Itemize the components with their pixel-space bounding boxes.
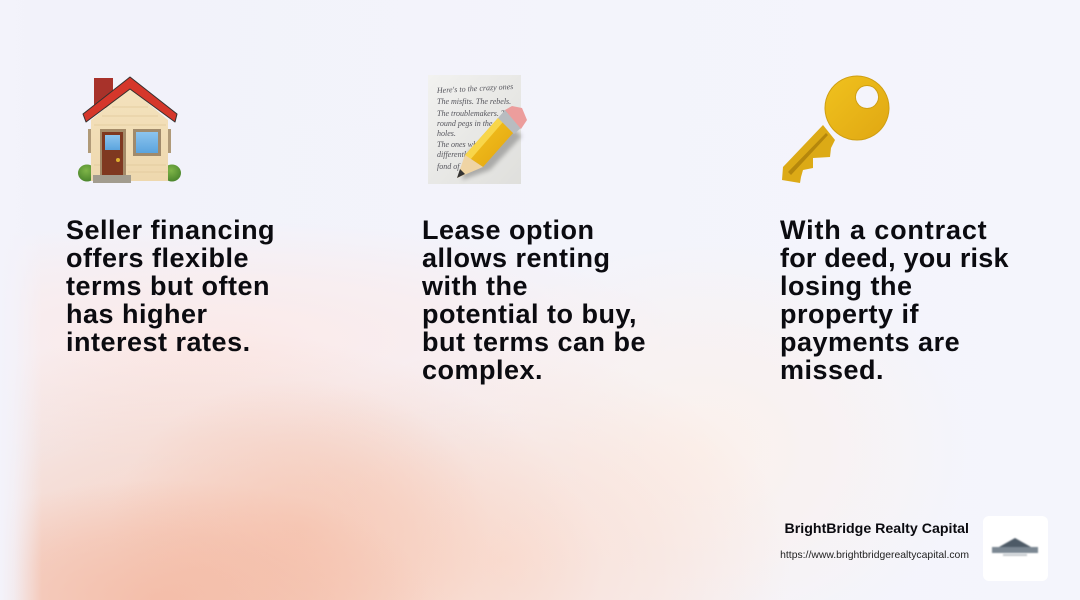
paper [428, 75, 521, 184]
text: lease option: allows renting [422, 243, 611, 273]
handwriting: The troublemakers. The [437, 109, 513, 118]
text: seller financing: offers flexible [66, 243, 249, 273]
text: contract for deed: property if [780, 299, 919, 329]
text: lease option [422, 215, 646, 385]
steps [93, 175, 131, 183]
window [133, 129, 161, 156]
icon: key [782, 76, 890, 183]
door [100, 129, 126, 176]
logo mark [991, 537, 1039, 557]
text: contract for deed: missed. [780, 355, 884, 385]
text: contract for deed: payments are [780, 327, 960, 357]
chimney [94, 78, 113, 108]
handwriting: holes. [437, 129, 456, 138]
text: seller financing [66, 215, 275, 357]
handwriting [436, 82, 514, 171]
text: seller financing: has higher [66, 299, 208, 329]
side shutters [88, 129, 91, 153]
website url: https://www.brightbridgerealtycapital.com [780, 550, 969, 561]
text: seller financing: interest rates. [66, 327, 251, 357]
brand name: BrightBridge Realty Capital [785, 521, 969, 537]
bushes [78, 164, 181, 182]
pencil [457, 106, 527, 178]
logo card [983, 516, 1048, 581]
door window [105, 135, 120, 150]
handwriting: differently [437, 150, 470, 159]
text: seller financing: terms but often [66, 271, 270, 301]
text: contract for deed: for deed, you risk [780, 243, 1009, 273]
handwriting: round pegs in the [437, 119, 493, 128]
handwriting: The ones who [437, 140, 481, 149]
handwriting: fond of [437, 162, 461, 171]
text: contract for deed: losing the [780, 271, 912, 301]
icon: memo with pencil [428, 75, 527, 184]
icon: house [78, 76, 181, 183]
handwriting: Here's to the crazy ones [436, 82, 514, 95]
text: contract for deed: With a contract [780, 215, 988, 245]
pencil shadow [462, 128, 522, 180]
text: lease option: potential to buy, [422, 299, 637, 329]
handwriting: The misfits. The rebels. [437, 97, 511, 106]
roof [83, 77, 177, 122]
text: lease option: but terms can be [422, 327, 646, 357]
text: lease option: with the [422, 271, 528, 301]
walls [91, 88, 168, 181]
key shaft [782, 125, 835, 183]
text: lease option: complex. [422, 355, 543, 385]
siding lines [94, 107, 168, 172]
text: contract for deed [780, 215, 1009, 385]
text: lease option: Lease option [422, 215, 595, 245]
key head with hole [825, 76, 889, 140]
text: seller financing: Seller financing [66, 215, 275, 245]
